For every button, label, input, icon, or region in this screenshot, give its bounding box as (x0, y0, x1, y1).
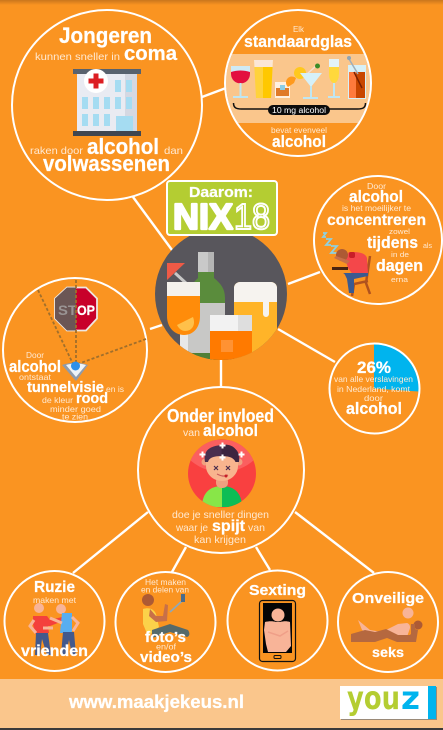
panel: tunnelvisie (3, 278, 147, 422)
text: 26%: 26% (357, 358, 391, 377)
label: 10 mg alcohol: 10 mg alcohol (272, 106, 326, 115)
text: kan krijgen: kan krijgen (194, 534, 246, 546)
text: videos: video’s (140, 649, 192, 666)
icon: hospital (73, 69, 141, 136)
dashed vision lines (38, 280, 146, 364)
text: door: Door (367, 182, 386, 191)
panel: standaardglas (220, 10, 380, 156)
brace (234, 103, 366, 109)
text: seks: seks (372, 644, 404, 660)
icon: sleeping student (323, 233, 370, 296)
text: erna: erna (391, 275, 409, 284)
icon: stop sign: OP (77, 302, 95, 318)
icon: champagne flute (328, 59, 340, 98)
text: alcohol: alcohol (9, 357, 61, 376)
text: elk: Elk (293, 25, 305, 34)
heading: standaardglas: standaardglas (244, 32, 352, 51)
panel: jongeren coma (12, 10, 202, 200)
text: waar je: waar je (175, 522, 208, 534)
text: alcohol: alcohol (203, 421, 258, 440)
text: dan: dan (164, 145, 183, 157)
pie slice (374, 344, 419, 392)
icon: wine glass (231, 66, 250, 98)
text: maken met: maken met (33, 595, 77, 605)
panel: ruzie (4, 571, 104, 671)
icon: fighting friends (30, 603, 78, 655)
text: tunnelvisie: tunnelvisie (27, 379, 104, 396)
text: alcohol: alcohol (346, 399, 402, 418)
text: website: www.maakjekeus.nl (68, 692, 244, 712)
illustration: drinks circle (155, 236, 287, 360)
icon: drunk person (188, 440, 256, 508)
text: 18: 18 (234, 196, 270, 237)
text: verslavingen: van alle verslavingen (334, 374, 413, 384)
text: moeilijker: is het moeilijker te (342, 204, 412, 213)
text: raken door: raken door (30, 145, 84, 157)
icon: martini glass (294, 64, 322, 99)
text: nederland: in Nederland, komt (337, 384, 411, 394)
text: spijt: spijt (212, 518, 246, 535)
text: concentreren: concentreren (327, 212, 426, 229)
text: alcohol: alcohol (349, 187, 403, 206)
text: en is: en is (106, 385, 124, 394)
panel: onveilige seks (338, 572, 438, 672)
text: door: Door (26, 351, 44, 360)
connector lines (73, 88, 374, 573)
heading: ruzie: Ruzie (34, 579, 75, 596)
icon: stop sign: ST (58, 302, 77, 318)
heading: sexting: Sexting (249, 582, 306, 599)
icon: long drink (347, 56, 366, 99)
icon: stop sign (55, 288, 97, 330)
text: bevat evenveel: bevat evenveel (271, 125, 327, 135)
heading: onder invloed: Onder invloed (167, 406, 274, 426)
text: het maken: Het maken (145, 578, 186, 587)
icon: eye (62, 362, 88, 381)
icon: beer mug (234, 282, 277, 363)
panel: 26 percent (330, 344, 420, 434)
text: van: van (248, 522, 265, 534)
text: in de: in de (391, 250, 409, 259)
text: nix: NIX (173, 196, 233, 237)
icon: bottle (187, 252, 225, 368)
text: kunnen sneller in: kunnen sneller in (35, 51, 120, 63)
icon: phone (260, 600, 296, 662)
text: coma: coma (124, 43, 178, 65)
text: vrienden: vrienden (21, 643, 88, 660)
logo: youz: z (401, 679, 420, 717)
text: daarom: Daarom: (189, 184, 253, 201)
panel: sexting (228, 570, 328, 670)
text: volwassenen: volwassenen (43, 151, 170, 176)
text: alcohol: alcohol (272, 132, 326, 151)
heading: onveilige: Onveilige (352, 590, 424, 607)
panel: onder invloed (138, 387, 304, 553)
text: tijdens: tijdens (367, 233, 418, 252)
panel: fotos (116, 572, 216, 672)
icon: short glass (210, 315, 252, 360)
text: minder goed: minder goed (50, 404, 101, 414)
text: als: als (423, 241, 432, 250)
icon: cocktail (167, 263, 200, 351)
text: alcohol: alcohol (87, 134, 159, 159)
panel: concentreren (314, 176, 442, 304)
text: te zien: te zien (62, 412, 88, 422)
text: en delen van: en delen van (141, 586, 189, 594)
icon: selfie person (142, 594, 189, 638)
icon: whisky glass (275, 76, 296, 98)
text: ontstaat: ontstaat (19, 372, 52, 382)
logo: youz (340, 679, 437, 720)
text: rood: rood (76, 390, 108, 407)
text: fotos: foto’s (145, 629, 186, 646)
heading: jongeren: Jongeren (59, 23, 152, 48)
icon: beer glass (254, 60, 273, 98)
text: door: door (364, 393, 383, 403)
text: de kleur: de kleur (42, 396, 73, 405)
logo: youz: you (347, 679, 400, 717)
peach band (220, 54, 380, 123)
text: van: van (183, 428, 200, 439)
footer band (0, 679, 443, 730)
icon: couple (351, 608, 422, 642)
text: en/of: en/of (156, 642, 177, 652)
text: doe je sneller: doe je sneller dingen (172, 509, 269, 521)
text: zowel: zowel (389, 227, 410, 236)
badge: daarom nix18 (167, 181, 277, 237)
text: dagen: dagen (376, 256, 423, 275)
